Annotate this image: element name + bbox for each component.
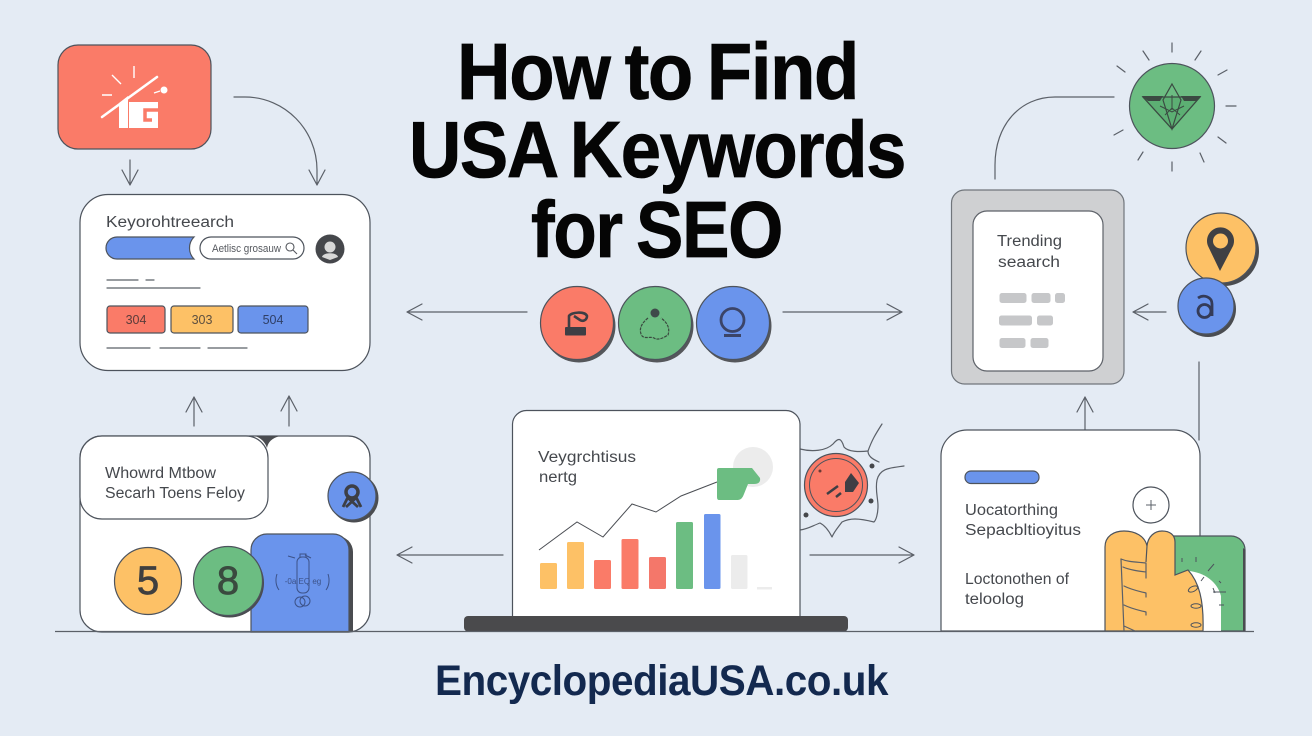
text card	[80, 436, 268, 519]
icon: avatar	[316, 234, 344, 264]
arrow: logo card down to keyword panel	[122, 160, 138, 185]
blue search bar	[106, 237, 194, 259]
search field	[200, 237, 304, 259]
placeholder rows	[999, 293, 1065, 348]
location text: Uocatorthing	[965, 502, 1058, 519]
search field: Aetlisc grosauw	[212, 243, 281, 255]
badge: 504 blue: 504	[263, 313, 283, 327]
panel: location data	[941, 430, 1200, 631]
laptop heading: nertg	[539, 469, 577, 486]
arrow: left from centre row	[407, 304, 527, 320]
tablet heading: seaarch	[998, 254, 1060, 271]
plus button	[1133, 487, 1169, 523]
heading: keyword research: Keyorohtreearch	[106, 214, 234, 231]
tablet heading	[997, 233, 1062, 271]
arrow: right to location panel	[810, 547, 914, 563]
blue illustration tile: -0a EQ eg	[285, 577, 321, 586]
badge: 304 red	[107, 306, 165, 333]
badge: 304 red: 304	[126, 313, 146, 327]
green arrow tag	[717, 468, 760, 500]
icon: green circle	[618, 286, 694, 362]
badge: 504 blue	[238, 306, 308, 333]
title: How to Find	[457, 27, 858, 116]
icon: blue circle	[696, 286, 772, 362]
blue tag	[965, 471, 1039, 484]
icon: coral circle	[540, 286, 616, 362]
circle: number 8: 8	[217, 559, 239, 603]
grey sun behind arrowhead	[733, 447, 773, 487]
arrow: left to search trends panel	[397, 547, 503, 563]
arrow: up to tablet	[1077, 397, 1093, 430]
icon: coral splash badge	[800, 424, 904, 537]
tablet heading: Trending	[997, 233, 1062, 250]
title: USA Keywords	[409, 105, 905, 194]
badge: 303 yellow	[171, 306, 233, 333]
laptop base	[464, 616, 848, 632]
bar chart	[540, 514, 772, 590]
arrow: up left	[186, 397, 202, 426]
arrow: left to tablet	[1133, 304, 1166, 320]
connector: vertical line	[1198, 362, 1200, 440]
location text: teloolog	[965, 591, 1024, 608]
circle: number 5	[114, 548, 182, 614]
laptop heading	[538, 449, 636, 486]
title: for SEO	[531, 185, 782, 274]
arrow: up right	[281, 396, 297, 426]
connector: curved line from sun to tablet	[995, 97, 1114, 179]
icon: green emblem with rays	[1114, 43, 1236, 171]
text card: Whowrd Mtbow	[105, 465, 217, 482]
location text: Sepacbltioyitus	[965, 522, 1081, 539]
line chart	[539, 482, 717, 550]
badge: 303 yellow: 303	[192, 313, 212, 327]
circle: number 5: 5	[137, 559, 159, 603]
icon: blue link circle	[1178, 278, 1236, 337]
panel: keyword research	[80, 194, 370, 370]
panel: search trends	[80, 436, 378, 632]
blue illustration tile	[251, 534, 353, 632]
title	[409, 27, 905, 274]
laptop heading: Veygrchtisus	[538, 449, 636, 466]
circle: number 8	[194, 546, 264, 618]
arrow: curved logo card to keyword panel	[234, 97, 325, 185]
footer brand: EncyclopediaUSA.co.uk	[435, 657, 889, 705]
illustration: thumbs up on green card	[1105, 531, 1246, 631]
icon: blue ribbon badge	[328, 472, 378, 522]
location text: Loctonothen of	[965, 571, 1070, 588]
location text	[965, 502, 1081, 608]
arrow: right from centre row	[783, 304, 902, 320]
text card: Secarh Toens Feloy	[105, 485, 245, 502]
ground line	[55, 630, 1254, 632]
icon: yellow location pin	[1186, 213, 1259, 286]
panel: trending search tablet	[952, 190, 1124, 384]
panel: laptop with trend chart	[512, 410, 800, 617]
panel: coral logo card	[58, 45, 211, 149]
